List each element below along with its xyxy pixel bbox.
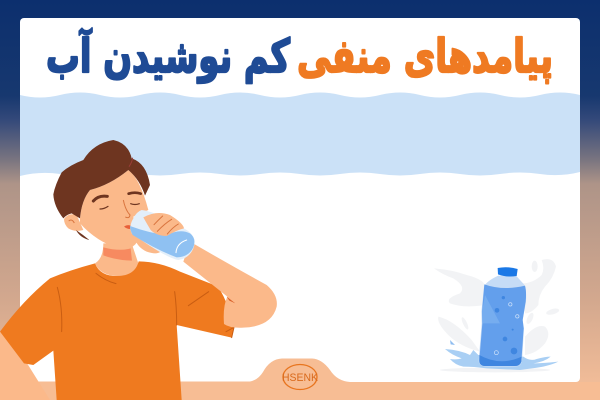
- body and arms: [0, 242, 277, 400]
- back of hand: [135, 235, 161, 253]
- title: [46, 28, 553, 84]
- eyebrows: [93, 196, 107, 201]
- orange t-shirt: [0, 261, 234, 400]
- illustration: water bottle with splash: [434, 259, 560, 372]
- neck shadow: [103, 247, 132, 261]
- hair: [53, 140, 150, 218]
- fingers: [143, 213, 184, 236]
- grey splash backdrop: [434, 259, 560, 355]
- title: blue part: کم نوشیدن آب: [46, 28, 290, 83]
- bottle cap: [498, 267, 518, 277]
- footer strip with logo tab: [0, 358, 600, 400]
- head: [53, 140, 195, 260]
- eyes: [100, 206, 108, 209]
- icon: HSENK logo: [282, 364, 319, 390]
- left arm: [0, 332, 50, 400]
- bottle plastic: [479, 276, 526, 367]
- bottle water: [479, 284, 526, 366]
- water splash: [445, 349, 558, 370]
- shirt fold lines: [57, 273, 234, 338]
- ground shadow: [440, 368, 550, 372]
- glass: [130, 210, 195, 260]
- nose: [123, 200, 130, 218]
- glass highlight: [176, 240, 187, 253]
- neck: [95, 243, 138, 276]
- bottle base shading: [479, 355, 522, 366]
- forearm: [183, 242, 277, 328]
- ear: [64, 214, 83, 231]
- bubbles: [495, 296, 517, 354]
- panel: light blue wave band: [20, 92, 580, 176]
- logo text: HSENK: [282, 372, 319, 384]
- illustration: man drinking water: [0, 140, 277, 400]
- water in glass: [130, 226, 194, 257]
- lips: [124, 225, 131, 229]
- face: [80, 170, 148, 249]
- bottle body: [479, 276, 526, 367]
- bottle waist shading: [482, 295, 500, 323]
